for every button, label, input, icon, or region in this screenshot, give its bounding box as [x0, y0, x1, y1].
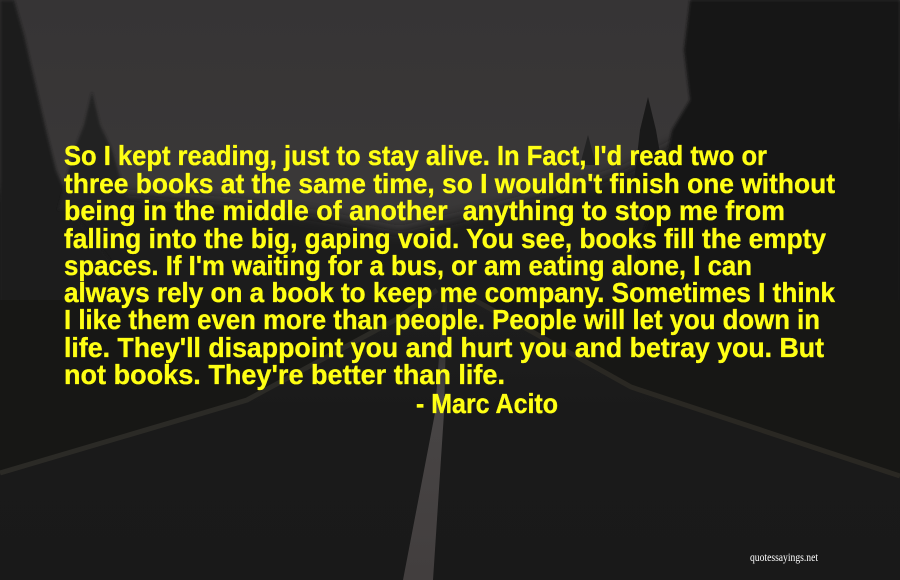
right trees [620, 0, 900, 340]
distant hills [0, 120, 900, 340]
quote text [64, 140, 835, 390]
quote text: I like them even more than people. People will let you down in [64, 304, 820, 335]
road surface [0, 290, 900, 580]
quote text: always rely on a book to keep me company. Sometimes I think [64, 277, 835, 308]
quote text: three books at the same time, so I wouldn't finish one without [64, 168, 835, 199]
left road edge [0, 290, 437, 473]
quote text: being in the middle of another anything to stop me from [64, 195, 785, 226]
left trees [0, 0, 110, 340]
quote text: spaces. If I'm waiting for a bus, or am eating alone, I can [64, 250, 752, 281]
author attribution: - Marc Acito [416, 388, 558, 419]
sky [0, 0, 900, 320]
quote text: falling into the big, gaping void. You see, books fill the empty [64, 223, 826, 254]
quote text: So I kept reading, just to stay alive. In Fact, I'd read two or [64, 140, 767, 171]
quote text: life. They'll disappoint you and hurt you and betray you. But [64, 332, 824, 363]
right road edge [456, 290, 900, 476]
road centre line [403, 300, 447, 580]
quote text: not books. They're better than life. [64, 359, 505, 390]
watermark: quotessayings.net [750, 550, 819, 564]
roadside ground [0, 300, 900, 500]
